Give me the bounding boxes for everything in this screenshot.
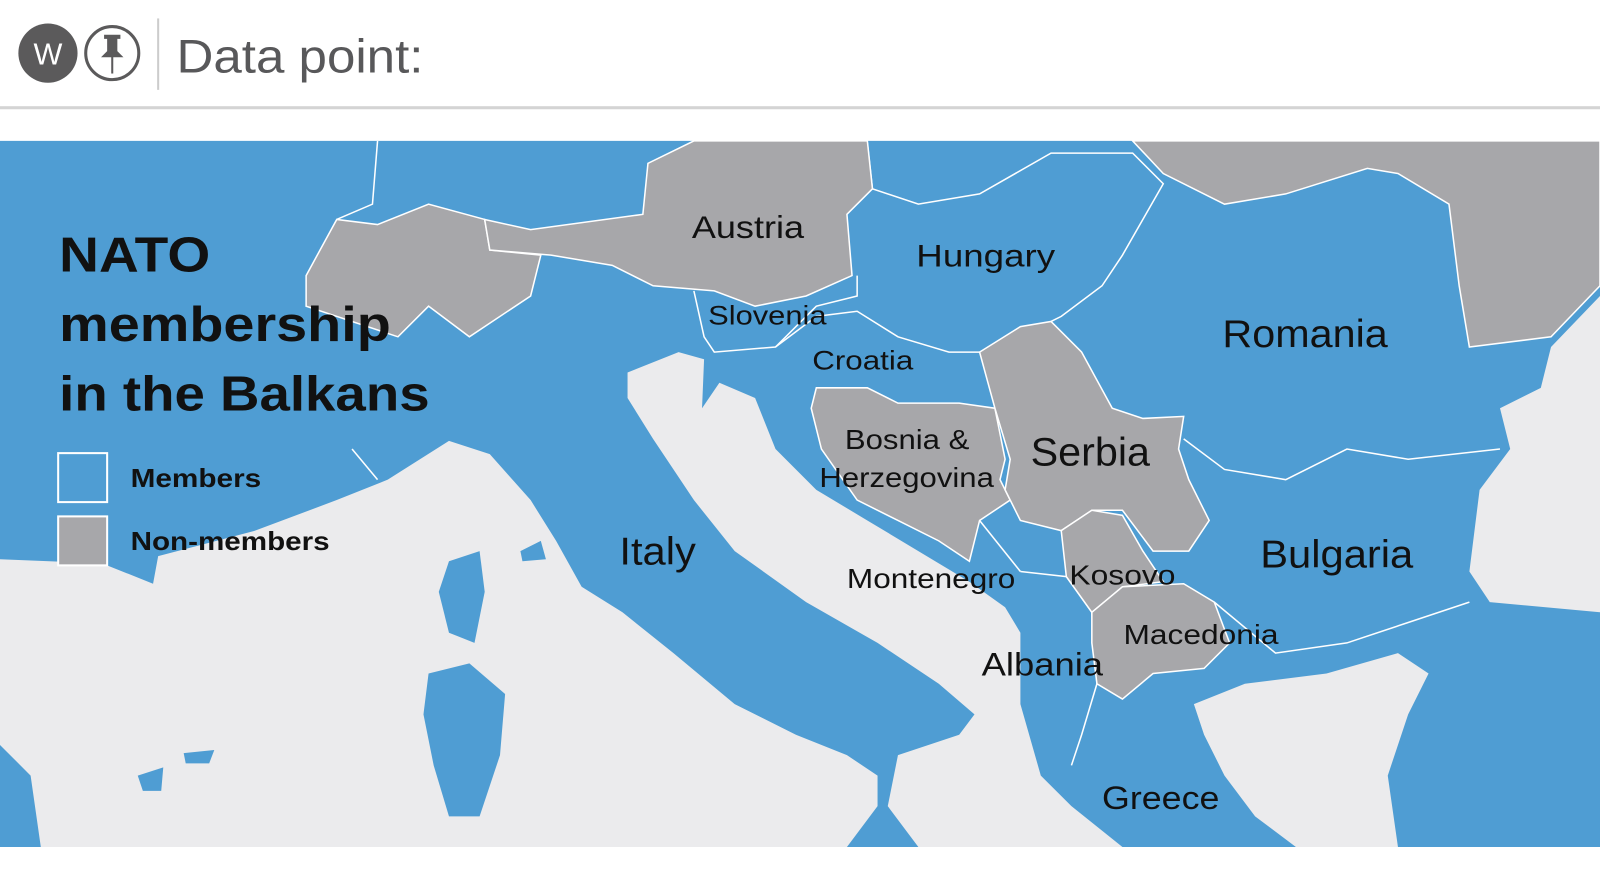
non-member: Serbia bbox=[980, 321, 1209, 551]
country labels: Montenegro bbox=[847, 563, 1015, 594]
header bbox=[0, 18, 1600, 109]
icon: pushpin bbox=[86, 27, 139, 80]
country labels: Croatia bbox=[812, 345, 914, 375]
borders of members bbox=[337, 141, 1500, 765]
islands bbox=[439, 551, 485, 643]
country labels: Romania bbox=[1222, 313, 1388, 356]
sea: Adriatic and Ionian bbox=[628, 352, 1122, 847]
country labels: Bulgaria bbox=[1260, 533, 1414, 576]
country labels: Serbia bbox=[1031, 430, 1151, 474]
sea: Black Sea bbox=[1469, 296, 1600, 612]
country labels bbox=[619, 209, 1414, 816]
legend: Members bbox=[131, 465, 261, 493]
country labels: Kosovo bbox=[1069, 560, 1176, 591]
country labels: Bosnia & bbox=[845, 424, 969, 455]
country labels: Austria bbox=[692, 209, 805, 245]
country labels: Macedonia bbox=[1123, 619, 1279, 650]
country labels: Herzegovina bbox=[819, 462, 995, 493]
title: NATO bbox=[59, 228, 210, 282]
legend bbox=[58, 453, 330, 565]
country labels: Hungary bbox=[916, 237, 1055, 273]
icon: WW logo bbox=[18, 24, 78, 83]
country labels: Slovenia bbox=[708, 301, 827, 331]
title: membership bbox=[59, 298, 391, 352]
title bbox=[59, 228, 430, 421]
map bbox=[0, 141, 1600, 847]
country labels: Greece bbox=[1102, 779, 1219, 816]
header title: Data point: bbox=[177, 31, 423, 83]
sea: Aegean bbox=[1194, 653, 1429, 847]
country labels: Italy bbox=[619, 530, 697, 573]
country labels: Albania bbox=[982, 646, 1104, 683]
icon: WW logo: W bbox=[34, 37, 63, 71]
legend: Non-members bbox=[131, 528, 330, 556]
sea: western Mediterranean bbox=[0, 441, 878, 847]
non-member: Switzerland bbox=[306, 204, 541, 337]
non-member: Ukraine / Moldova bbox=[1133, 141, 1600, 347]
non-member: Bosnia bbox=[811, 388, 1010, 561]
non-member: Macedonia bbox=[1092, 584, 1230, 699]
non-member: Kosovo bbox=[1061, 510, 1163, 612]
title: in the Balkans bbox=[59, 367, 430, 421]
non-member: Austria bbox=[485, 141, 872, 306]
